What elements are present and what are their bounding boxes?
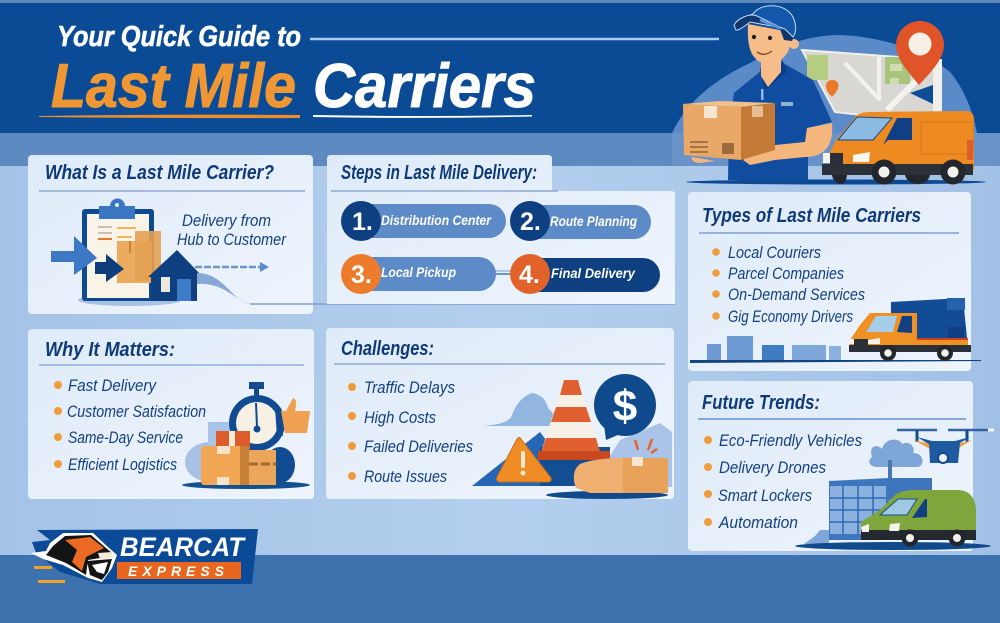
logo: Bearcat Express: EXPRESS (128, 563, 225, 579)
list: Failed Deliveries (364, 437, 473, 456)
heading: Steps in Last Mile Delivery: (341, 162, 537, 184)
step 2: 2. (520, 208, 541, 236)
heading: Types of Last Mile Carriers (702, 205, 921, 227)
step 1: 1. (352, 208, 373, 236)
logo: Bearcat Express: BEARCAT (120, 532, 246, 562)
panel: steps in last mile delivery (327, 155, 675, 304)
icon: green van (795, 490, 991, 550)
map (802, 50, 941, 116)
list: Gig Economy Drivers (728, 307, 853, 326)
list: Parcel Companies (728, 264, 844, 283)
panel: why it matters (28, 329, 314, 499)
icon: bearcat head (31, 533, 117, 583)
step 4 (510, 254, 660, 294)
list: High Costs (364, 408, 436, 427)
step 1: Distribution Center (381, 212, 492, 228)
list: Efficient Logistics (68, 455, 177, 474)
description: Hub to Customer (177, 230, 287, 249)
step 2: Route Planning (550, 213, 637, 229)
step 3: 3. (351, 261, 372, 289)
icon: building (804, 478, 932, 544)
icon: clipboard, parcel and house (51, 198, 675, 306)
list (54, 376, 206, 474)
list (704, 431, 862, 532)
step 1 (341, 201, 506, 241)
step 3 (341, 254, 496, 294)
heading: Future Trends: (702, 392, 820, 414)
list: Eco-Friendly Vehicles (719, 431, 862, 450)
icon: cone, warning, dollar and damaged parcel (472, 374, 672, 499)
panel: what is a last mile carrier (28, 155, 675, 314)
skyline (690, 336, 981, 363)
list: Local Couriers (728, 243, 821, 262)
list: Fast Delivery (68, 376, 157, 395)
list: Traffic Delays (364, 378, 455, 397)
list (348, 378, 473, 486)
heading: What Is a Last Mile Carrier? (45, 162, 274, 184)
list: Customer Satisfaction (67, 402, 206, 421)
heading: Challenges: (341, 338, 434, 360)
orange van (822, 111, 974, 184)
description (177, 211, 287, 249)
list: Automation (718, 513, 798, 532)
courier (728, 6, 832, 180)
list: Route Issues (364, 467, 447, 486)
ground shadow (686, 180, 986, 184)
icon: tree (869, 440, 923, 480)
list: On-Demand Services (728, 285, 865, 304)
step 3: Local Pickup (381, 264, 456, 280)
list (712, 243, 865, 326)
icon: stopwatch, thumb and parcels (182, 382, 310, 489)
step 4: 4. (519, 261, 540, 289)
arc backdrop (672, 35, 977, 133)
parcel (683, 101, 775, 163)
logo: Bearcat Express (31, 529, 258, 584)
panel: types of last mile carriers (688, 192, 981, 371)
icon: drone (897, 430, 994, 463)
icon: location pin (896, 21, 944, 85)
panel: future trends (688, 381, 994, 551)
hero illustration: courier, map and van (672, 6, 1000, 184)
description: Delivery from (182, 211, 271, 230)
heading: Why It Matters: (45, 339, 175, 361)
title: Carriers (313, 52, 536, 121)
arrow (195, 262, 269, 272)
step 4: Final Delivery (551, 265, 636, 281)
cap (748, 6, 796, 37)
title (39, 21, 719, 121)
list: Same-Day Service (68, 428, 183, 447)
list: Smart Lockers (718, 486, 812, 505)
icon: cone, warning, dollar and damaged parcel: $ (613, 382, 637, 431)
title: Last Mile (51, 52, 296, 121)
list: Delivery Drones (719, 458, 826, 477)
step 2 (510, 201, 651, 241)
icon: truck (849, 298, 971, 361)
title: Your Quick Guide to (57, 21, 301, 53)
panel: challenges (326, 328, 674, 499)
